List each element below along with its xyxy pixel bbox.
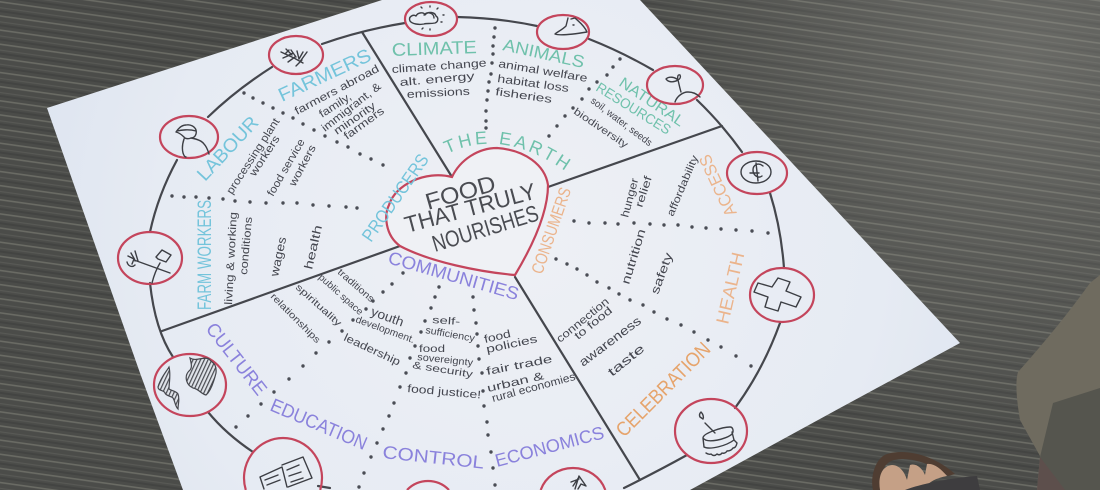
list: culture xyxy=(268,267,376,346)
list: farmers: farmers xyxy=(342,105,387,142)
list: culture: public space xyxy=(316,272,365,318)
list: culture: relationships xyxy=(268,291,323,346)
heading: control: CONTROL xyxy=(382,442,485,473)
heading: communities: COMMUNITIES xyxy=(386,248,521,304)
list: farmers xyxy=(293,63,387,142)
list: control: sufficiency xyxy=(424,325,476,345)
list: climate: climate change xyxy=(391,57,487,76)
list: economics xyxy=(483,328,577,405)
icon: animal xyxy=(537,15,589,49)
list: culture: traditions xyxy=(335,267,376,305)
heart: food that truly nourishes: NOURISHES xyxy=(429,200,542,257)
list: labour: workers xyxy=(247,133,283,180)
icon: labour worker xyxy=(160,116,218,158)
list: farmers: immigrant, & xyxy=(319,80,384,134)
panel: the earth xyxy=(391,35,687,170)
list: access: relief xyxy=(633,174,655,209)
list: natural resources: soil, water, seeds xyxy=(588,96,654,149)
list: farmers: family, xyxy=(317,91,354,121)
list: education: youth xyxy=(369,304,406,329)
heading: natural resources: RESOURCES xyxy=(593,79,674,138)
list: health: nutrition xyxy=(618,227,649,286)
list: access xyxy=(619,153,702,219)
list: farmers: minority xyxy=(332,100,379,137)
list: control: food justice! xyxy=(407,383,482,401)
list: celebration: connection xyxy=(554,296,612,345)
list: economics: policies xyxy=(485,333,539,356)
list: celebration: taste xyxy=(605,341,647,379)
list: health: safety xyxy=(648,251,676,296)
icon: control xyxy=(407,481,449,490)
heading: economics: ECONOMICS xyxy=(493,423,606,471)
icon: natural resources seedling xyxy=(647,66,703,104)
list: economics: urban & xyxy=(486,370,546,395)
list: education xyxy=(342,304,416,368)
heading: climate: CLIMATE xyxy=(391,37,477,60)
list: culture: spirituality xyxy=(293,282,344,329)
heading: health: HEALTH xyxy=(712,250,748,326)
list: climate: alt. energy xyxy=(399,70,476,89)
list: animals: habitat loss xyxy=(497,73,570,95)
person's trouser leg xyxy=(1016,275,1100,490)
icon: celebration cake xyxy=(675,399,747,463)
list: control: & security xyxy=(412,360,474,381)
dotted spokes xyxy=(172,28,768,487)
list: economics: food xyxy=(483,328,512,346)
panel: producers xyxy=(193,45,433,310)
list: celebration: to food xyxy=(572,305,615,342)
list: farm workers xyxy=(223,212,325,305)
list: animals: fisheries xyxy=(495,86,553,106)
list: climate: emissions xyxy=(407,86,471,101)
list: access: hunger xyxy=(619,177,641,219)
heading: consumers: CONSUMERS xyxy=(528,185,575,276)
list: control xyxy=(407,315,482,401)
list: celebration: awareness xyxy=(576,314,644,369)
list: control: sovereignty xyxy=(417,352,474,369)
heart: food that truly nourishes: FOOD xyxy=(422,170,499,215)
heart: food that truly nourishes: THAT TRULY xyxy=(402,178,539,238)
heading: producers: PRODUCERS xyxy=(358,150,433,245)
heading: access: ACCESS xyxy=(696,151,741,219)
list: education: development. xyxy=(354,314,416,346)
list: labour: workers xyxy=(287,143,319,189)
list: farmers: farmers abroad xyxy=(293,63,381,118)
list: economics: fair trade xyxy=(485,353,553,378)
heading: animals: ANIMALS xyxy=(501,35,586,72)
heading: farmers: FARMERS xyxy=(275,45,375,107)
list: farm workers: health xyxy=(301,224,325,271)
list: farm workers: conditions xyxy=(238,216,255,275)
list: natural resources: biodiversity xyxy=(571,106,630,151)
icon: culture globe xyxy=(154,354,226,416)
list: farm workers: living & working xyxy=(223,212,240,305)
list: access: affordability xyxy=(665,153,702,218)
list: animals: animal welfare xyxy=(498,58,588,85)
wheel outline and spokes xyxy=(150,17,784,488)
list: animals xyxy=(495,58,588,106)
list: health xyxy=(618,227,676,296)
panel: consumers xyxy=(528,151,748,442)
icon: access coin xyxy=(727,152,787,194)
list: labour: processing plant xyxy=(224,116,282,197)
heading: farm workers: FARM WORKERS xyxy=(195,200,216,310)
icon: farmers wheat xyxy=(269,36,323,74)
list: control: food xyxy=(419,344,445,355)
icon: climate cloud and sun xyxy=(405,2,457,36)
heading: labour: LABOUR xyxy=(193,113,263,185)
icon: health cross xyxy=(750,268,814,322)
heading: the earth: THE EARTH xyxy=(442,131,571,170)
heading: natural resources: NATURAL xyxy=(616,74,687,130)
heading: celebration: CELEBRATION xyxy=(612,338,715,442)
list: economics: rural economies xyxy=(491,371,577,405)
foot in sandal xyxy=(872,452,980,490)
list: celebration xyxy=(554,296,647,379)
heart: food that truly nourishes xyxy=(386,148,548,275)
list: education: leadership xyxy=(342,332,402,368)
list: control: self- xyxy=(432,315,460,328)
heading: education: EDUCATION xyxy=(267,395,370,455)
icon: education book xyxy=(244,438,322,490)
panel: communities xyxy=(201,248,606,473)
icon: farm workers tools xyxy=(118,232,182,284)
list: climate xyxy=(391,57,487,101)
icon: economics arrow xyxy=(541,468,605,490)
list: labour xyxy=(224,116,319,198)
heading: culture: CULTURE xyxy=(201,319,271,400)
list: labour: food service xyxy=(265,137,308,198)
list: farm workers: wages xyxy=(267,236,289,279)
